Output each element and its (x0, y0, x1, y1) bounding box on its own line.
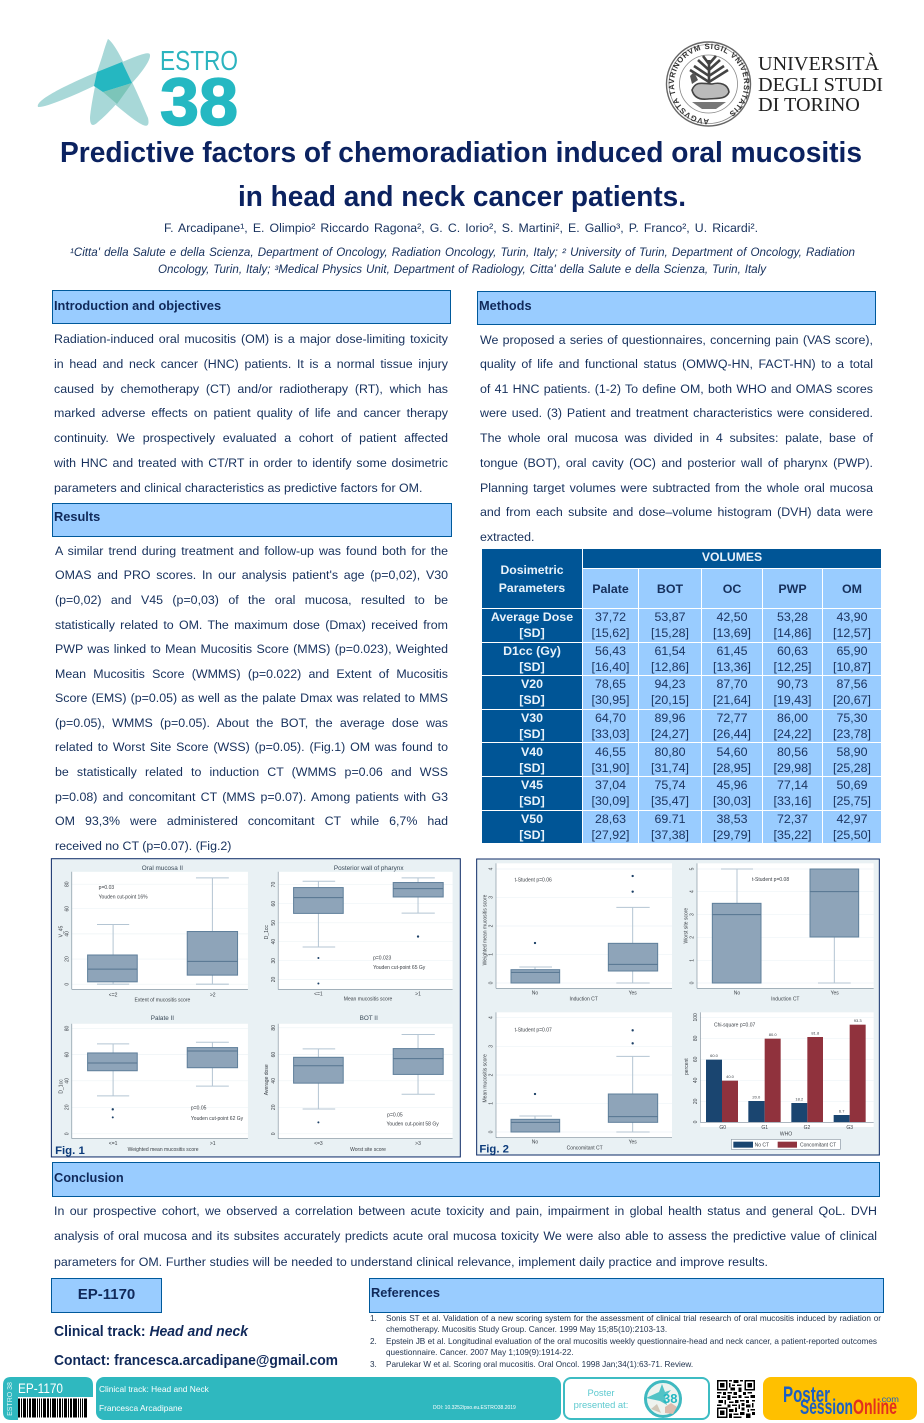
chart: posterior wall of pharynx: 20 (271, 976, 277, 982)
text block: results: Score (EMS) (p=0.05) as well as the palate Dmax was related to MMS (55, 691, 448, 705)
figure label: Fig. 1 (55, 1145, 85, 1157)
text block: introduction: continuity. We prospectively evaluated a cohort of patient affected (54, 431, 448, 445)
table: dosimetric parameters by volume: 56,43 (595, 644, 626, 658)
text block: results: OMAS and PRO scores. In our analysis patient's age (p=0,02), V30 (55, 568, 448, 582)
table: dosimetric parameters by volume: 46,55 (595, 745, 626, 759)
affiliations: Oncology, Turin, Italy; ³Medical Physics Unit, Department of Radiology, Citta' della Salute e della Scienza, Turin, Italy (158, 263, 766, 276)
chart: worst site score by induction CT: 5 (690, 867, 696, 870)
table: dosimetric parameters by volume: PWP (778, 582, 807, 596)
table: dosimetric parameters by volume: 75,30 (836, 711, 868, 725)
table: dosimetric parameters by volume: 53,28 (777, 610, 808, 624)
chart: worst site score by induction CT: Induction CT (771, 996, 800, 1002)
table: dosimetric parameters by volume: [29,79] (713, 828, 751, 842)
title (60, 137, 862, 213)
table: dosimetric parameters by volume: 37,04 (595, 778, 626, 792)
chart: posterior wall of pharynx: 50 (271, 920, 277, 926)
table: dosimetric parameters by volume: [SD] (519, 660, 545, 674)
table: dosimetric parameters by volume: Parameters (499, 580, 565, 594)
logo text: PosterSessionOnline: Poster (783, 1382, 830, 1407)
chart: weighted mean mucositis score by induction CT (482, 863, 672, 1002)
table: dosimetric parameters by volume: [13,69] (713, 626, 751, 640)
chart: BOT: 40 (271, 1078, 277, 1084)
chart: palate: Weighted mean mucositis score (128, 1147, 199, 1153)
chart: weighted mean mucositis score by induction CT: 1 (489, 953, 495, 956)
logo: Università di Torino seal: AVGVSTA TAVRINORVM SIGIL VNIVERSITATIS (668, 44, 750, 124)
chart: WHO grade by concomitant CT: 40.0 (726, 1074, 735, 1079)
chart: posterior wall of pharynx: <=1 (314, 991, 323, 997)
poster id: EP-1170: EP-1170 (78, 1286, 135, 1303)
references list: questionnaire. Cancer. 2007 May 1;109(9):1914-22. (386, 1348, 574, 1357)
panel: Fig. 2 box plots and bar chart (476, 858, 880, 1156)
text block: conclusion: analysis of oral mucosa and its subsites accurately predicts acute oral mucosa toxicity We were also able to assess the predictive value of clinical (54, 1229, 877, 1243)
chart: posterior wall of pharynx: 60 (271, 901, 277, 906)
chart: WHO grade by concomitant CT: G3 (846, 1125, 853, 1131)
table: dosimetric parameters by volume: BOT (657, 582, 683, 596)
chart: oral mucosa: Youden cut-point 16% (99, 895, 148, 901)
footer: QR code (717, 1380, 755, 1418)
text block: conclusion: parameters for OM. Further studies will be needed to understand clinical relevance, implement daily practice and improve results. (54, 1255, 768, 1269)
table: dosimetric parameters by volume: [29,98] (774, 761, 811, 775)
table: dosimetric parameters by volume: [15,62] (592, 626, 629, 640)
chart: weighted mean mucositis score by induction CT: 0 (489, 981, 495, 984)
chart: worst site score by induction CT: 1 (690, 959, 696, 962)
references list: Epstein JB et al. Longitudinal evaluation of the oral mucositis weekly questionnaire-head and neck cancer, a patient-reported outcomes (386, 1337, 877, 1346)
text block: introduction: caused by chemotherapy (CT) and/or radiotherapy (RT), which has (54, 382, 448, 396)
chart: weighted mean mucositis score by induction CT: No (532, 991, 538, 997)
table: dosimetric parameters by volume: V50 (521, 812, 543, 826)
chart: weighted mean mucositis score by induction CT: Weighted mean mucositis score (482, 894, 488, 965)
text block: methods: The whole oral mucosa was divided in 4 subsites: palate, base of (480, 431, 873, 445)
table: dosimetric parameters by volume: 90,73 (777, 677, 808, 691)
text block: results: related to Worst Site Score (WSS) (p=0.05). (Fig.1) OM was found to (55, 740, 448, 754)
heading: Methods (477, 291, 876, 325)
chart: worst site score by induction CT: 4 (690, 890, 696, 893)
chart: oral mucosa: 80 (64, 881, 70, 887)
table: dosimetric parameters by volume: OC (723, 582, 741, 596)
chart: oral mucosa: Extent of mucositis score (135, 997, 190, 1003)
text block: methods: and from each subsite and dose–volume histogram (DVH) data were (480, 505, 873, 519)
table: dosimetric parameters by volume: 80,80 (654, 745, 686, 759)
table: dosimetric parameters by volume: 43,90 (836, 610, 868, 624)
table: dosimetric parameters by volume: V45 (521, 778, 543, 792)
chart: palate: 60 (64, 1052, 70, 1057)
chart: posterior wall of pharynx: 40 (271, 939, 277, 944)
chart: oral mucosa: 20 (64, 956, 70, 962)
authors: F. Arcadipane¹, E. Olimpio² Riccardo Ragona², G. C. Iorio², S. Martini², E. Gallio³, P. Franco², U. Ricardi². (164, 221, 758, 235)
chart: palate: 40 (64, 1078, 70, 1084)
references list: 2. (370, 1337, 377, 1346)
references list: Sonis ST et al. Validation of a new scoring system for the assessment of clinical trial research of oral mucositis induced by radiation or (386, 1314, 881, 1323)
heading: Introduction and objectives (52, 290, 451, 324)
chart: worst site score by induction CT: 0 (690, 981, 696, 984)
table: dosimetric parameters by volume: [28,95] (713, 761, 751, 775)
logo: ESTRO 38 (38, 39, 238, 135)
chart: oral mucosa: 60 (64, 906, 70, 912)
chart: oral mucosa: 0 (64, 983, 70, 986)
table: dosimetric parameters by volume: [23,78] (833, 727, 871, 741)
chart: weighted mean mucositis score by induction CT: 3 (489, 896, 495, 899)
heading: Results (52, 503, 452, 537)
text block: results (55, 544, 448, 853)
chart: oral mucosa: Oral mucosa II (142, 865, 183, 872)
heading: Conclusion: Conclusion (54, 1170, 124, 1185)
chart: mean mucositis score by concomitant CT: 4 (489, 1016, 495, 1019)
footer: poster presented at: 38 (663, 1391, 677, 1406)
logo text: Università degli Studi di Torino: UNIVERSITÀ (758, 53, 879, 75)
table: dosimetric parameters by volume: 38,53 (716, 812, 748, 826)
chart: mean mucositis score by concomitant CT: No (532, 1140, 538, 1146)
text block: results: received no CT (p=0.07). (Fig.2) (55, 839, 231, 853)
table: dosimetric parameters by volume: 61,45 (716, 644, 748, 658)
text block: results: Mean Mucositis Score (WMMS) (p=0.022) and Extent of Mucositis (55, 667, 448, 681)
table: dosimetric parameters by volume: [20,15] (651, 693, 689, 707)
text block: methods: tongue (BOT), oral cavity (OC) and posterior wall of pharynx (PWP). (480, 456, 873, 470)
table: dosimetric parameters by volume: [35,47] (651, 794, 689, 808)
legend: Concomitant CT (800, 1143, 836, 1149)
chart: mean mucositis score by concomitant CT: t-Student p=0.07 (515, 1027, 552, 1033)
footer: session banner: Clinical track: Head and Neck (99, 1384, 209, 1394)
chart: WHO grade by concomitant CT: G1 (761, 1125, 768, 1131)
table: dosimetric parameters by volume: [31,90] (592, 761, 629, 775)
table: dosimetric parameters by volume: 65,90 (836, 644, 868, 658)
chart: palate: Youden cut-point 62 Gy (191, 1116, 244, 1122)
chart: WHO grade by concomitant CT: 60 (693, 1056, 699, 1062)
footer: PosterSessionOnline badge (763, 1377, 917, 1420)
table: dosimetric parameters by volume: [30,09] (592, 794, 629, 808)
text block: introduction: Radiation-induced oral mucositis (OM) is a major dose-limiting toxicity (54, 332, 448, 346)
footer: session banner: Francesca Arcadipane (99, 1403, 182, 1413)
text block: results: OM 93,3% were administered concomitant CT while 6,7% had (55, 814, 448, 828)
chart: worst site score by induction CT (684, 863, 874, 1002)
table: dosimetric parameters by volume: 58,90 (836, 745, 868, 759)
chart: mean mucositis score by concomitant CT: Mean mucositis score (482, 1054, 488, 1103)
chart: palate: D_1cc (58, 1079, 64, 1094)
table: dosimetric parameters by volume: [33,03] (592, 727, 629, 741)
heading: Methods: Methods (479, 298, 532, 313)
text block: introduction: with HNC and treated with CT/RT in order to identify some dosimetric (54, 456, 448, 470)
chart: weighted mean mucositis score by induction CT: t-Student p=0.06 (515, 878, 552, 884)
table: dosimetric parameters by volume: [31,74] (651, 761, 689, 775)
heading: Introduction and objectives: Introduction and objectives (54, 298, 221, 313)
chart: weighted mean mucositis score by induction CT: 2 (489, 924, 495, 927)
chart: weighted mean mucositis score by induction CT: 4 (489, 867, 495, 870)
text block: results: PWP was linked to Mean Mucositis Score (MMS) (p=0.023), Weighted (55, 642, 448, 656)
text block: methods: extracted. (480, 530, 534, 544)
footer: session banner (96, 1377, 561, 1420)
title: Predictive factors of chemoradiation induced oral mucositis (60, 137, 862, 169)
text block: introduction: in head and neck cancer (HNC) patients. It is a normal tissue injury (54, 357, 448, 371)
chart: mean mucositis score by concomitant CT: Concomitant CT (567, 1145, 603, 1151)
footer: poster presented at: Poster (587, 1387, 615, 1398)
chart: palate: >1 (210, 1141, 216, 1147)
table: dosimetric parameters by volume: OM (842, 582, 862, 596)
chart: posterior wall of pharynx: 70 (271, 882, 277, 887)
chart: WHO grade by concomitant CT: 81.8 (811, 1030, 820, 1035)
chart: WHO grade by concomitant CT: 100 (693, 1013, 699, 1022)
heading: References: References (371, 1285, 440, 1300)
chart: WHO grade by concomitant CT: G0 (719, 1125, 726, 1131)
text block: conclusion: In our prospective cohort, we observed a correlation between acute toxicity and pain, impairment in global health status and general QoL. DVH (54, 1204, 877, 1218)
chart: posterior wall of pharynx: Youden cut-point 65 Gy (373, 965, 426, 971)
text block: results: (p=0.05), WMMS (p=0.05). About the BOT, the average dose was (55, 716, 448, 730)
table: dosimetric parameters by volume: 45,96 (716, 778, 748, 792)
text block: conclusion (54, 1204, 877, 1269)
affiliations (70, 246, 855, 276)
chart: BOT: 20 (271, 1104, 277, 1110)
table: dosimetric parameters by volume: [20,67] (833, 693, 871, 707)
table: dosimetric parameters by volume: [SD] (519, 626, 545, 640)
table: dosimetric parameters by volume: 89,96 (654, 711, 686, 725)
table: dosimetric parameters by volume: Average Dose (491, 610, 573, 624)
references list (370, 1314, 881, 1369)
table: dosimetric parameters by volume: Palate (592, 582, 629, 596)
text block: introduction: parameters and clinical characteristics as predictive factors for OM. (54, 481, 422, 495)
heading: References (369, 1278, 884, 1313)
table: dosimetric parameters by volume: 64,70 (595, 711, 626, 725)
text block: results: be statistically related to induction CT (WMMS p=0.06 and WSS (55, 765, 448, 779)
table: dosimetric parameters by volume: 28,63 (595, 812, 626, 826)
text block: methods: of 41 HNC patients. (1-2) To define OM, both WHO and OMAS scores (480, 382, 873, 396)
table: dosimetric parameters by volume: [26,44] (713, 727, 751, 741)
footer: poster id and barcode (3, 1377, 93, 1420)
chart: worst site score by induction CT: Worst site score (684, 908, 690, 944)
panel: Fig. 1 box plots (50, 858, 461, 1158)
references list: chemotherapy. Mucositis Study Group. Cancer. 1999 May 15;85(10):2103-13. (386, 1325, 667, 1334)
chart: palate (58, 1015, 248, 1153)
chart: WHO grade by concomitant CT: WHO (780, 1131, 792, 1137)
table: dosimetric parameters by volume: 86,00 (777, 711, 808, 725)
table: dosimetric parameters by volume: [30,03] (713, 794, 751, 808)
chart: WHO grade by concomitant CT: 60.0 (710, 1053, 719, 1058)
table: dosimetric parameters by volume: [27,92] (592, 828, 629, 842)
text block: results: A similar trend during treatment and follow-up was found both for the (55, 544, 448, 558)
chart: WHO grade by concomitant CT: Chi-square p=0.07 (714, 1023, 755, 1029)
chart: worst site score by induction CT: Yes (831, 991, 839, 997)
chart: BOT: <=3 (314, 1141, 323, 1147)
chart: weighted mean mucositis score by induction CT: Induction CT (569, 996, 598, 1002)
chart: oral mucosa: 40 (64, 931, 70, 937)
chart: WHO grade by concomitant CT: 20 (693, 1098, 699, 1104)
table: dosimetric parameters by volume: 42,97 (836, 812, 868, 826)
table: dosimetric parameters by volume (482, 549, 881, 843)
table: dosimetric parameters by volume: 42,50 (716, 610, 748, 624)
table: dosimetric parameters by volume: [12,86] (651, 660, 689, 674)
table: dosimetric parameters by volume: Dosimetric (500, 562, 564, 576)
chart: palate: 20 (64, 1104, 70, 1110)
table: dosimetric parameters by volume: 37,72 (595, 610, 626, 624)
chart: palate: Palate II (151, 1015, 174, 1022)
logo text: Università degli Studi di Torino (758, 52, 883, 116)
chart: palate: p=0.05 (191, 1106, 207, 1112)
table: dosimetric parameters by volume: 75,74 (654, 778, 686, 792)
chart: oral mucosa: <=2 (109, 992, 118, 998)
heading: Conclusion (52, 1162, 880, 1197)
text block: introduction: marked adverse effects on patient quality of life and cancer therapy (54, 406, 448, 420)
table: dosimetric parameters by volume: VOLUMES (702, 550, 762, 564)
table: dosimetric parameters by volume: [35,22] (774, 828, 811, 842)
footer: poster id and barcode: ESTRO 38 (7, 1382, 14, 1416)
chart: posterior wall of pharynx: >1 (415, 991, 421, 997)
chart: mean mucositis score by concomitant CT: 1 (489, 1102, 495, 1105)
text block: results: (p=0,02) and V45 (p=0,03) of the oral mucosa, resulted to be (55, 593, 448, 607)
table: dosimetric parameters by volume: [33,16] (774, 794, 811, 808)
chart: posterior wall of pharynx: Posterior wall of pharynx (334, 865, 404, 872)
chart: palate: <=1 (109, 1141, 118, 1147)
table: dosimetric parameters by volume: [37,38] (651, 828, 689, 842)
table: dosimetric parameters by volume: [21,64] (713, 693, 751, 707)
poster id: EP-1170 (51, 1278, 162, 1313)
text block: results: statistically related to OM. The maximum dose (Dmax) received from (55, 618, 448, 632)
chart: mean mucositis score by concomitant CT: 0 (489, 1130, 495, 1133)
chart: WHO grade by concomitant CT (684, 1012, 874, 1137)
table: dosimetric parameters by volume: 53,87 (654, 610, 686, 624)
title: in head and neck cancer patients. (238, 181, 686, 213)
table: dosimetric parameters by volume: [24,22] (774, 727, 811, 741)
chart: WHO grade by concomitant CT: 20.0 (752, 1094, 761, 1099)
chart: posterior wall of pharynx: D_1cc (264, 925, 270, 939)
chart: BOT: 80 (271, 1025, 277, 1031)
table: dosimetric parameters by volume: [25,50] (833, 828, 871, 842)
text block: methods: quality of life and functional status (OMWQ-HN, FACT-HN) to a total (480, 357, 873, 371)
table: dosimetric parameters by volume: 72,37 (777, 812, 808, 826)
chart: WHO grade by concomitant CT: 40 (693, 1077, 699, 1083)
chart: WHO grade by concomitant CT: 80 (693, 1035, 699, 1041)
chart: BOT: Average dose (264, 1064, 270, 1095)
references list: 1. (370, 1314, 377, 1323)
table: dosimetric parameters by volume: 87,70 (716, 677, 748, 691)
chart: BOT: 60 (271, 1052, 277, 1057)
text block: methods: were used. (3) Patient and treatment characteristics were considered. (480, 406, 873, 420)
chart: mean mucositis score by concomitant CT: Yes (629, 1140, 637, 1146)
table: dosimetric parameters by volume: [19,43] (774, 693, 811, 707)
chart: posterior wall of pharynx: p=0.023 (373, 956, 392, 962)
table: dosimetric parameters by volume: 50,69 (836, 778, 868, 792)
table: dosimetric parameters by volume: V40 (521, 745, 543, 759)
references list: 3. (370, 1360, 377, 1369)
chart: mean mucositis score by concomitant CT: 2 (489, 1073, 495, 1076)
figure label: Fig. 2 (479, 1144, 509, 1156)
chart: WHO grade by concomitant CT: 6.7 (839, 1108, 845, 1113)
table: dosimetric parameters by volume: [30,95] (592, 693, 629, 707)
table: dosimetric parameters by volume: [24,27] (651, 727, 689, 741)
table: dosimetric parameters by volume: 94,23 (654, 677, 686, 691)
table: dosimetric parameters by volume: [25,28] (833, 761, 871, 775)
table: dosimetric parameters by volume: [SD] (519, 828, 545, 842)
table: dosimetric parameters by volume: 54,60 (716, 745, 748, 759)
chart: WHO grade by concomitant CT: 93.3 (854, 1018, 862, 1023)
chart: WHO grade by concomitant CT: percent (684, 1058, 690, 1075)
chart: WHO grade by concomitant CT: G2 (804, 1125, 811, 1131)
table: dosimetric parameters by volume: [SD] (519, 727, 545, 741)
table: dosimetric parameters by volume: [12,57] (833, 626, 871, 640)
footer: poster presented at (563, 1377, 710, 1420)
logo text: PosterSessionOnline: Session (800, 1396, 853, 1419)
table: dosimetric parameters by volume: 69.71 (654, 812, 686, 826)
logo text: PosterSessionOnline: .com (879, 1395, 899, 1404)
chart: palate: 80 (64, 1025, 70, 1031)
logo text: Università degli Studi di Torino: DEGLI STUDI (758, 74, 883, 96)
chart: BOT: Youden cut-point 58 Gy (387, 1121, 439, 1127)
table: dosimetric parameters by volume: 78,65 (595, 677, 626, 691)
chart: worst site score by induction CT: 3 (690, 913, 696, 916)
table: dosimetric parameters by volume: V20 (521, 677, 543, 691)
table: dosimetric parameters by volume: 72,77 (716, 711, 748, 725)
chart: weighted mean mucositis score by induction CT: Yes (629, 991, 637, 997)
logo text: Università degli Studi di Torino: DI TORINO (758, 94, 860, 116)
table: dosimetric parameters by volume: [15,28] (651, 626, 689, 640)
chart: posterior wall of pharynx (264, 865, 453, 1003)
footer: poster presented at: presented at: (574, 1399, 628, 1410)
logo text: PosterSessionOnline (783, 1382, 899, 1419)
text block: introduction (54, 332, 448, 495)
chart: posterior wall of pharynx: 30 (271, 958, 277, 963)
table: dosimetric parameters by volume: D1cc (Gy) (503, 644, 561, 658)
affiliations: ¹Citta' della Salute e della Scienza, Department of Oncology, Radiation Oncology, Turin, Italy; ² University of Turin, Department of Oncology, Radiation (70, 246, 855, 259)
chart: BOT: 0 (271, 1132, 277, 1135)
table: dosimetric parameters by volume: [SD] (519, 794, 545, 808)
table: dosimetric parameters by volume: [16,40] (592, 660, 629, 674)
chart: BOT: BOT II (360, 1015, 378, 1022)
table: dosimetric parameters by volume: [14,86] (774, 626, 811, 640)
text block: results: p=0.08) and concomitant CT (MMS p=0.07). Among patients with G3 (55, 790, 448, 804)
text block: methods (480, 333, 874, 544)
chart: posterior wall of pharynx: Mean mucositis score (344, 997, 393, 1003)
chart: WHO grade by concomitant CT: 0 (693, 1120, 699, 1123)
table: dosimetric parameters by volume: [13,36] (713, 660, 751, 674)
chart: worst site score by induction CT: 2 (690, 936, 696, 939)
legend: No CT (755, 1143, 769, 1149)
text block: methods: Planning target volumes were subtracted from the whole oral mucosa (480, 481, 873, 495)
table: dosimetric parameters by volume: [SD] (519, 761, 545, 775)
chart: mean mucositis score by concomitant CT: 3 (489, 1045, 495, 1048)
heading: Results: Results (54, 509, 100, 524)
clinical track: Clinical track: Head and neck (54, 1323, 249, 1340)
table: dosimetric parameters by volume: 61,54 (654, 644, 686, 658)
legend (731, 1139, 840, 1149)
footer: poster id and barcode: EP-1170 (18, 1381, 63, 1396)
chart: worst site score by induction CT: t-Student p=0.08 (752, 877, 789, 883)
chart: oral mucosa: V_45 (58, 925, 64, 937)
table: dosimetric parameters by volume: 80,56 (777, 745, 808, 759)
logo text: PosterSessionOnline: Online (853, 1396, 897, 1419)
chart: oral mucosa (58, 865, 248, 1003)
chart: BOT: p=0.05 (387, 1112, 403, 1118)
table: dosimetric parameters by volume: [12,25] (774, 660, 811, 674)
chart: WHO grade by concomitant CT: 18.2 (795, 1096, 804, 1101)
chart: worst site score by induction CT: No (734, 991, 740, 997)
footer: session banner: DOI: 10.3252/pso.eu.ESTRO38.2019 (433, 1405, 516, 1411)
table: dosimetric parameters by volume: [SD] (519, 693, 545, 707)
table: dosimetric parameters by volume: 87,56 (836, 677, 868, 691)
chart: oral mucosa: p=0.03 (99, 885, 114, 891)
chart: oral mucosa: >2 (210, 992, 216, 998)
table: dosimetric parameters by volume: V30 (521, 711, 543, 725)
table: dosimetric parameters by volume: [10,87] (833, 660, 871, 674)
table: dosimetric parameters by volume: 77,14 (777, 778, 808, 792)
chart: mean mucositis score by concomitant CT (482, 1012, 672, 1151)
chart: BOT: Worst site score (350, 1147, 386, 1153)
references list: Parulekar W et al. Scoring oral mucositis. Oral Oncol. 1998 Jan;34(1):63-71. Review. (386, 1360, 693, 1369)
table: dosimetric parameters by volume: 60,63 (777, 644, 808, 658)
chart: BOT (264, 1015, 453, 1153)
chart: palate: 0 (64, 1132, 70, 1135)
table: dosimetric parameters by volume: [25,75] (833, 794, 871, 808)
chart: WHO grade by concomitant CT: 80.0 (769, 1032, 777, 1037)
text block: methods: We proposed a series of questionnaires, concerning pain (VAS score), (480, 333, 873, 347)
chart: BOT: >3 (415, 1141, 421, 1147)
